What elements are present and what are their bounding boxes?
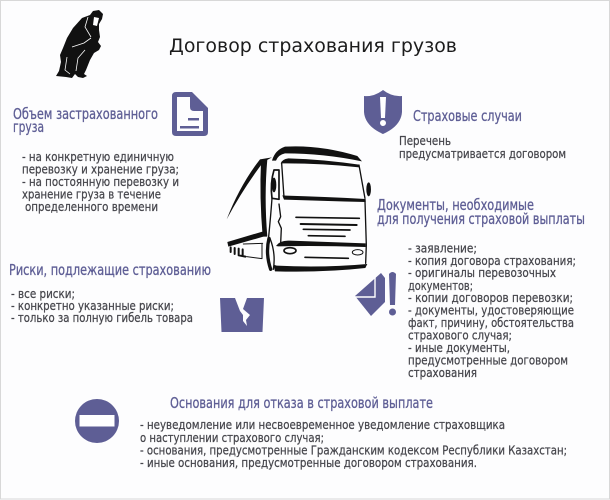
- text block: required documents: документов;: [408, 278, 473, 293]
- text block: insurable risks: - только за полную гибель товара: [11, 310, 193, 325]
- text block: required documents: предусмотренные договором: [408, 352, 568, 368]
- illustration: truck: [227, 146, 371, 272]
- text block: insurable risks: - конкретно указанные риски;: [11, 298, 174, 313]
- icon: thinker figure: [56, 10, 103, 78]
- panel: insurable risks: [9, 261, 264, 332]
- text block: grounds for refusal: о наступлении страхового случая;: [140, 430, 324, 445]
- text block: required documents: страхования: [408, 365, 477, 380]
- text block: required documents: - документы, удостоверяющие: [408, 302, 574, 318]
- panel: insured events: [364, 90, 566, 161]
- text block: insured cargo volume: - на постоянную перевозку и: [22, 174, 179, 189]
- icon: document: [172, 92, 208, 136]
- text block: insured events: предусматривается договором: [399, 146, 566, 161]
- text block: required documents: страхового случая;: [408, 328, 512, 342]
- title: Договор страхования грузов: [169, 36, 457, 57]
- heading: insured events: Страховые случаи: [413, 107, 522, 125]
- text block: required documents: - оригиналы перевозочных: [408, 265, 556, 280]
- text block: insured cargo volume: определенного времени: [25, 199, 158, 214]
- text block: insured events: Перечень: [399, 133, 451, 148]
- heading: insured cargo volume: Объем застрахованного: [13, 105, 158, 123]
- text block: required documents: - иные документы,: [408, 340, 510, 355]
- text block: insured cargo volume: [22, 149, 179, 214]
- text block: grounds for refusal: - неуведомление или несвоевременное уведомление страховщика: [140, 417, 505, 432]
- text block: insured events: [399, 133, 566, 161]
- heading: insured cargo volume: [13, 105, 158, 136]
- text block: insured cargo volume: хранение груза в течение: [22, 186, 161, 202]
- text block: insured cargo volume: - на конкретную единичную: [22, 149, 174, 164]
- icon: cracked block: [220, 298, 264, 332]
- icon: document with exclamation mark: [355, 272, 396, 316]
- heading: required documents: [377, 196, 585, 228]
- text block: required documents: [408, 240, 576, 380]
- heading: grounds for refusal: Основания для отказа в страховой выплате: [170, 394, 433, 412]
- text block: insurable risks: - все риски;: [11, 286, 75, 301]
- text block: grounds for refusal: [140, 417, 567, 470]
- text block: required documents: - копия договора страхования;: [408, 253, 576, 268]
- panel: insured cargo volume: [13, 92, 208, 214]
- icon: no entry sign: [75, 399, 119, 443]
- text block: required documents: - копии договоров перевозки;: [408, 290, 573, 305]
- text block: grounds for refusal: - иные основания, предусмотренные договором страхования.: [140, 455, 477, 470]
- heading: insured cargo volume: груза: [13, 118, 44, 136]
- text block: required documents: - заявление;: [408, 240, 477, 256]
- icon: shield: [364, 90, 402, 134]
- panel: required documents: [355, 196, 585, 380]
- heading: required documents: Документы, необходимые: [377, 196, 534, 214]
- text block: insured cargo volume: перевозку и хранение груза;: [22, 162, 179, 176]
- panel: grounds for refusal: [75, 394, 567, 470]
- heading: insurable risks: Риски, подлежащие страхованию: [9, 261, 211, 279]
- text block: insurable risks: [11, 286, 193, 325]
